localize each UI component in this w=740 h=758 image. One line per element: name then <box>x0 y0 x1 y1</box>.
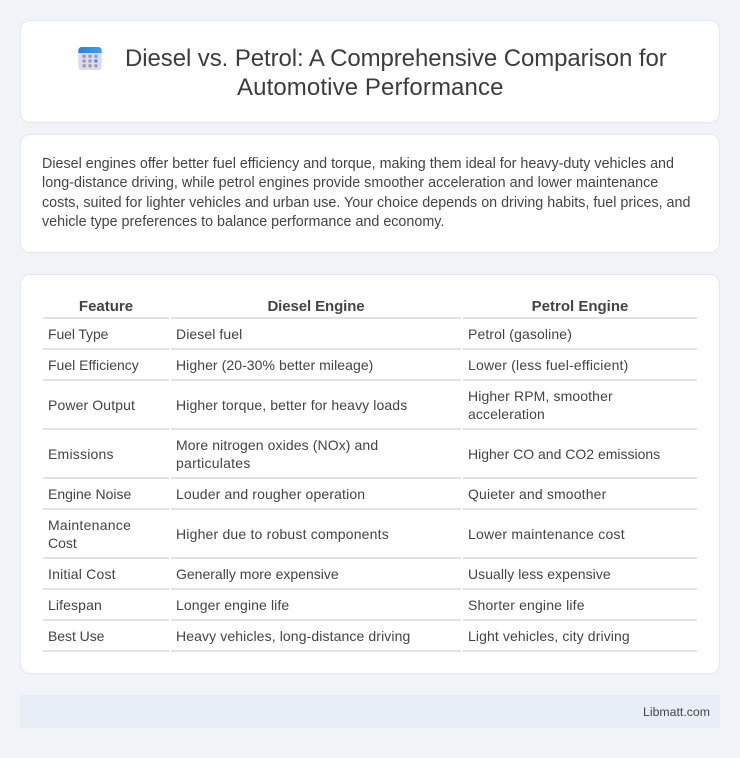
row: Fuel Efficiency: Fuel Efficiency <box>48 357 139 373</box>
comparison table: Diesel fuel <box>176 326 242 342</box>
comparison table: acceleration <box>468 406 545 422</box>
comparison table: Higher due to robust components <box>176 526 389 542</box>
intro text: costs, suited for lighter vehicles and urban use. Your choice depends on driving habits, fuel prices, and <box>42 195 690 211</box>
intro text: Diesel engines offer better fuel efficiency and torque, making them ideal for heavy-duty vehicles and <box>42 156 674 172</box>
row: Maintenance Cost: Maintenance <box>48 517 131 533</box>
row: Maintenance Cost <box>48 517 131 551</box>
comparison table: Light vehicles, city driving <box>468 628 630 644</box>
comparison table: Higher RPM, smoother <box>468 388 613 404</box>
table panel <box>20 274 720 674</box>
intro text: long-distance driving, while petrol engines provide smoother acceleration and lower maintenance <box>42 175 658 191</box>
row: Lifespan: Lifespan <box>48 597 102 613</box>
comparison table: particulates <box>176 455 251 471</box>
comparison table: Higher torque, better for heavy loads <box>176 397 407 413</box>
comparison table: More nitrogen oxides (NOx) and <box>176 437 378 453</box>
title: Diesel vs. Petrol: A Comprehensive Comparison for <box>125 45 667 72</box>
comparison table: Petrol (gasoline) <box>468 326 572 342</box>
footer bar <box>20 695 720 728</box>
column header: Feature: Feature <box>79 298 133 315</box>
comparison table: Lower maintenance cost <box>468 526 625 542</box>
footer text: Libmatt.com <box>643 705 710 719</box>
comparison table: Longer engine life <box>176 597 289 613</box>
intro text <box>42 156 690 230</box>
row: Initial Cost: Initial Cost <box>48 566 116 582</box>
column header: Petrol Engine: Petrol Engine <box>532 298 628 315</box>
comparison table: Quieter and smoother <box>468 486 606 502</box>
comparison table: Shorter engine life <box>468 597 585 613</box>
comparison table: Heavy vehicles, long-distance driving <box>176 628 410 644</box>
comparison table: Lower (less fuel-efficient) <box>468 357 628 373</box>
header panel <box>20 20 720 123</box>
comparison table: Higher (20-30% better mileage) <box>176 357 373 373</box>
title <box>125 45 667 101</box>
comparison table: Generally more expensive <box>176 566 339 582</box>
comparison table: Louder and rougher operation <box>176 486 365 502</box>
comparison table: Usually less expensive <box>468 566 611 582</box>
row: Maintenance Cost: Cost <box>48 535 77 551</box>
intro panel <box>20 134 720 253</box>
row: Fuel Type: Fuel Type <box>48 326 108 342</box>
column header: Diesel Engine: Diesel Engine <box>267 298 365 315</box>
row: Engine Noise: Engine Noise <box>48 486 131 502</box>
row: Best Use: Best Use <box>48 628 104 644</box>
comparison table: Higher CO and CO2 emissions <box>468 446 660 462</box>
title: Automotive Performance <box>237 74 504 101</box>
row: Power Output: Power Output <box>48 397 135 413</box>
intro text: vehicle type preferences to balance performance and economy. <box>42 214 444 230</box>
icon: calendar <box>78 47 102 70</box>
row: Emissions: Emissions <box>48 446 114 462</box>
